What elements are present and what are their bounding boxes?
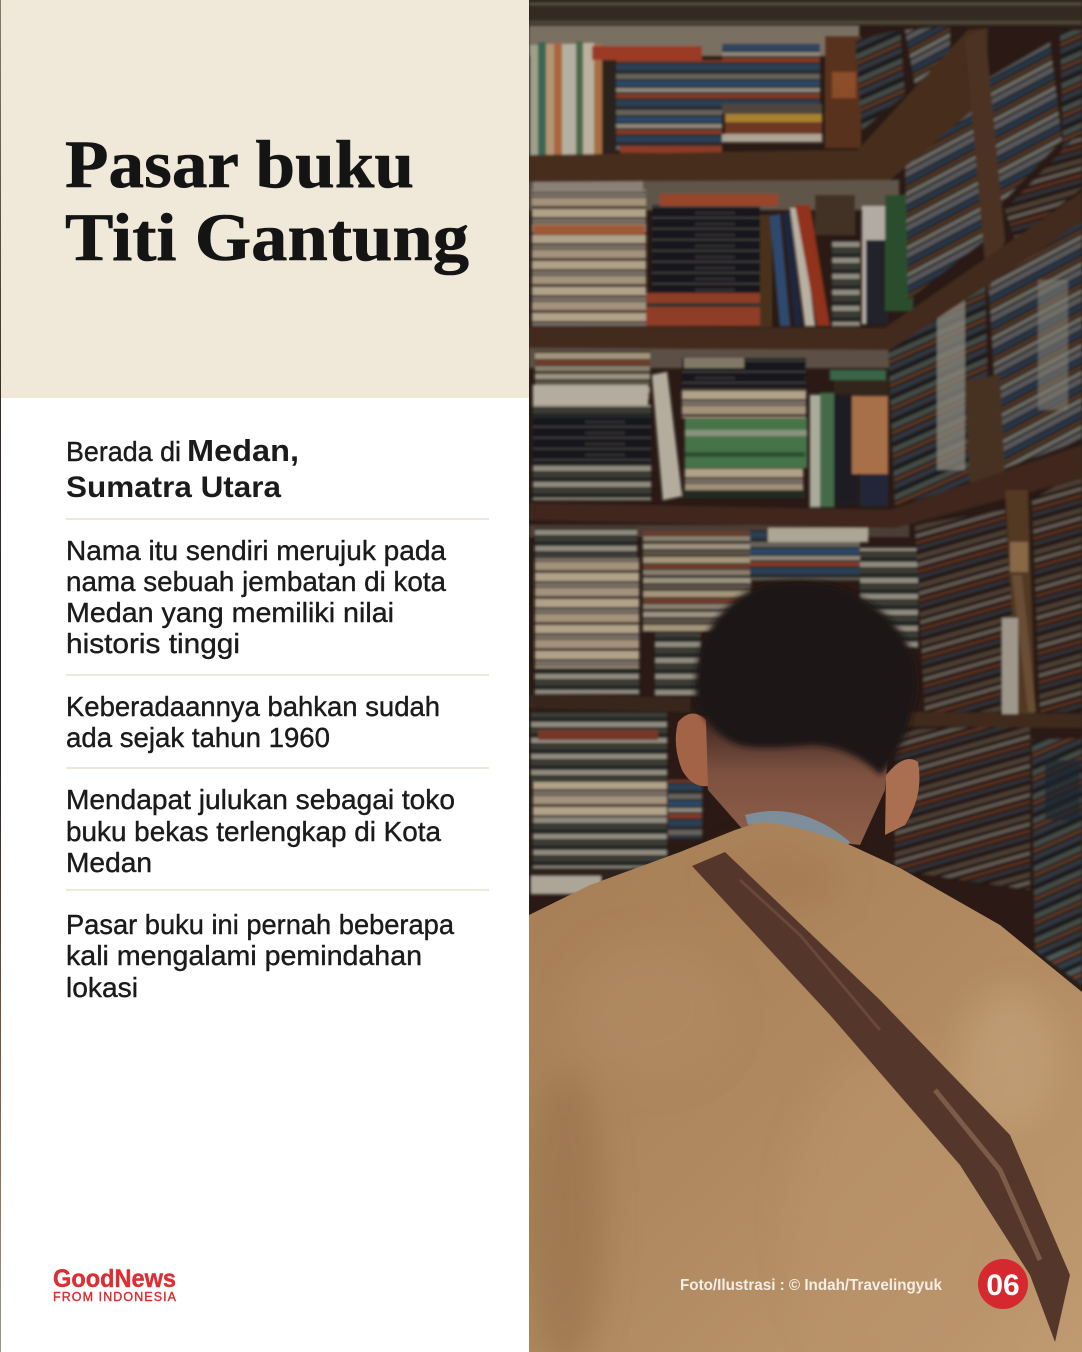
item: since 1960 <box>66 691 440 753</box>
item: location: Sumatra Utara <box>66 471 281 504</box>
fifth row books <box>531 712 667 782</box>
item: name origin: Medan yang memiliki nilai <box>66 597 394 628</box>
wooden shelves <box>529 28 988 182</box>
item: relocation: lokasi <box>66 972 138 1003</box>
page number badge <box>978 1259 1028 1309</box>
item: relocation <box>66 909 454 1003</box>
logo: GoodNews from Indonesia: FROM INDONESIA <box>53 1290 177 1304</box>
warm darkening overlay <box>529 0 1082 950</box>
second row books <box>532 190 646 326</box>
shirt shading <box>525 850 1060 1352</box>
item: location: Berada di <box>66 436 181 467</box>
top row books <box>530 41 615 155</box>
item: location <box>66 433 299 504</box>
item: since 1960: ada sejak tahun 1960 <box>66 722 330 753</box>
title: Titi Gantung <box>65 199 469 275</box>
title: Pasar buku <box>65 126 414 202</box>
man: neck and ears <box>676 713 919 850</box>
item: nickname <box>66 784 455 878</box>
third row books <box>550 340 660 348</box>
item: name origin: Nama itu sendiri merujuk pada <box>66 535 446 566</box>
item: nickname: Mendapat julukan sebagai toko <box>66 784 455 815</box>
item: name origin <box>66 535 446 659</box>
left edge strip <box>0 0 1 1352</box>
right side stacks <box>905 100 985 300</box>
fourth row books <box>535 528 637 558</box>
page number badge: 06 <box>986 1269 1020 1302</box>
photo: man browsing stacked books <box>529 0 1082 1352</box>
item: name origin: nama sebuah jembatan di kota <box>66 566 446 597</box>
man: shirt <box>529 822 1082 1352</box>
item: since 1960: Keberadaannya bahkan sudah <box>66 691 440 722</box>
title panel <box>1 0 529 398</box>
item: name origin: historis tinggi <box>66 628 240 659</box>
logo: GoodNews from Indonesia: GoodNews <box>53 1265 176 1293</box>
item: relocation: kali mengalami pemindahan <box>66 940 422 971</box>
shelf background <box>529 0 1082 1352</box>
man: hair <box>695 581 917 775</box>
item: relocation: Pasar buku ini pernah beberapa <box>66 909 454 940</box>
photo credit: Foto/Ilustrasi : © Indah/Travelingyuk <box>680 1277 942 1294</box>
man: shoulder strap <box>692 852 1070 1342</box>
item: location: Medan, <box>187 433 299 468</box>
item: nickname: Medan <box>66 847 152 878</box>
bookshelves and books <box>529 0 1082 985</box>
text list panel <box>66 433 489 1003</box>
item: nickname: buku bekas terlengkap di Kota <box>66 816 441 847</box>
title <box>65 126 469 276</box>
